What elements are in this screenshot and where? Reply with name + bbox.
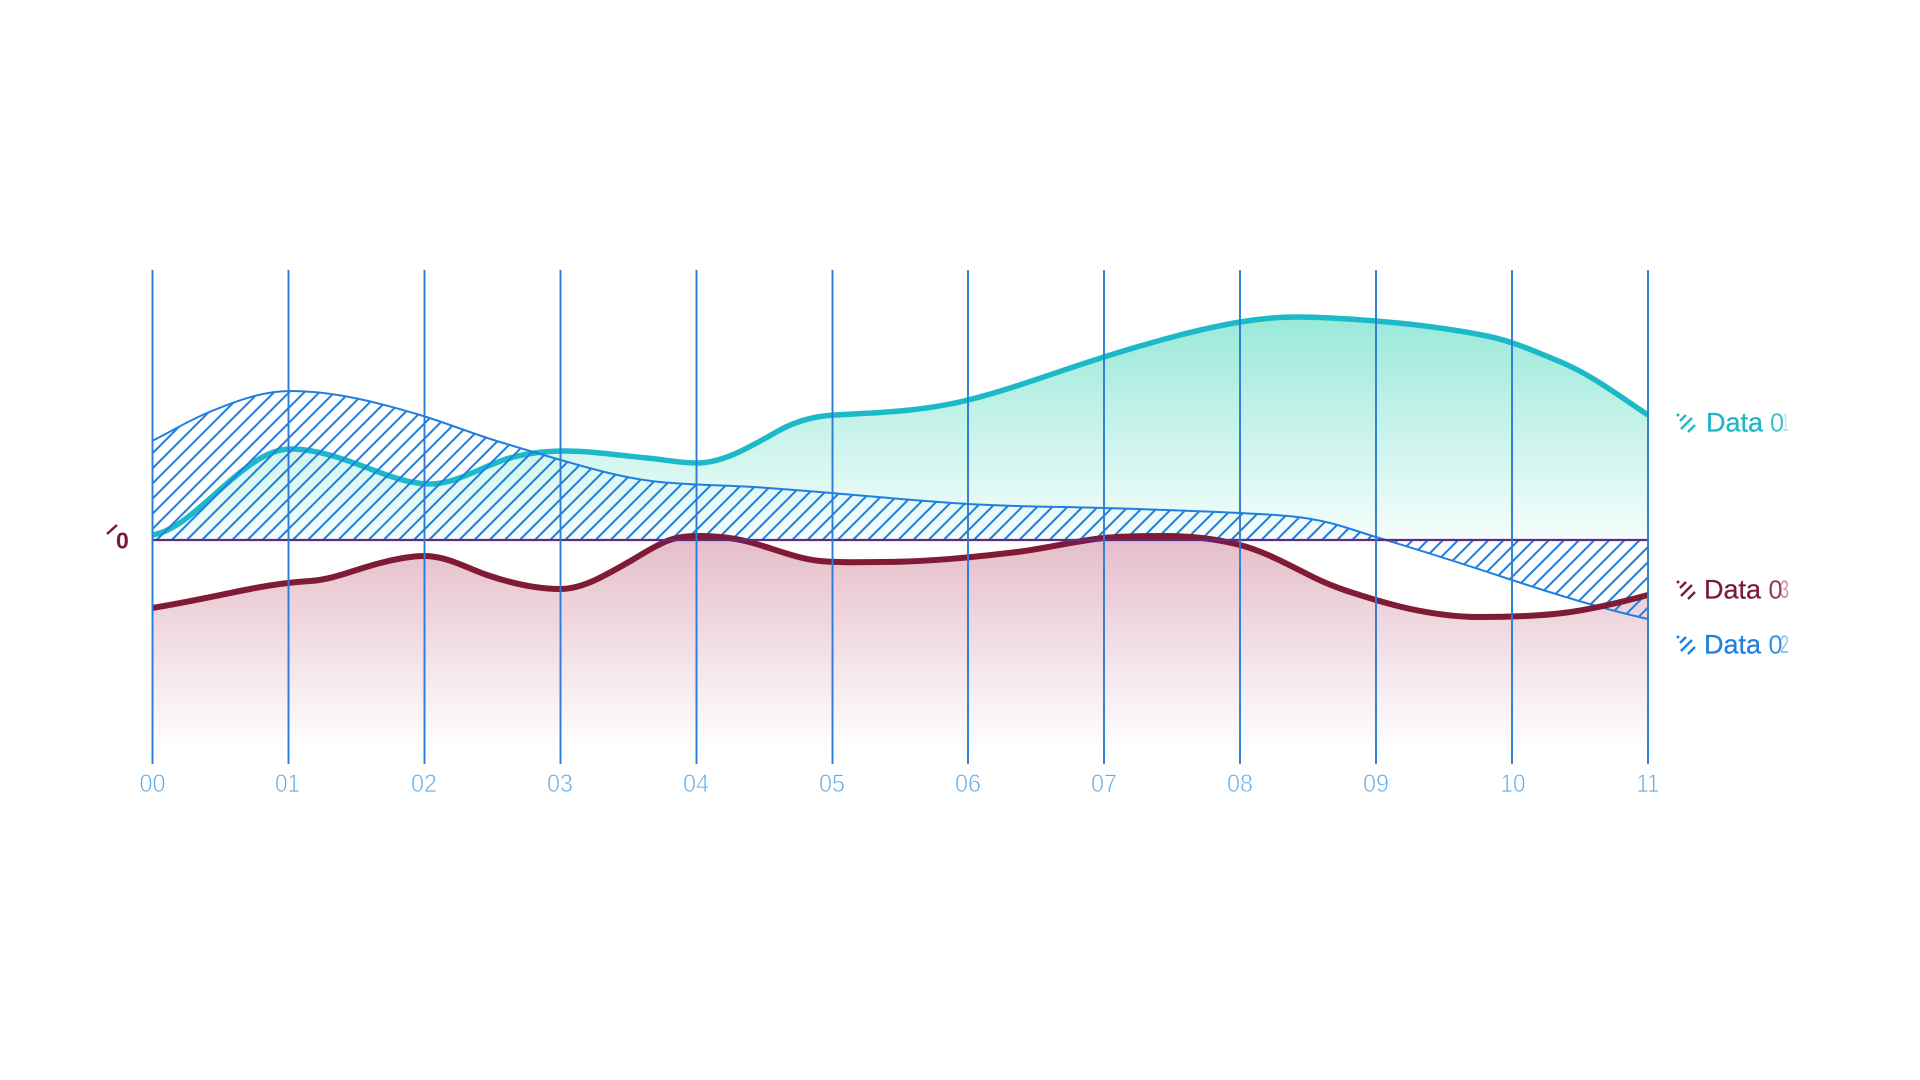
x-axis labels: 02	[411, 770, 437, 798]
x-axis labels: 03	[547, 770, 573, 798]
legend: Data 03: Data	[1704, 574, 1762, 604]
legend: Data 01: Data	[1706, 408, 1764, 438]
area chart infographic: 1	[1782, 409, 1788, 437]
x-axis labels: 01	[275, 770, 300, 798]
area chart infographic	[106, 270, 1788, 792]
legend: Data 02: Data	[1704, 630, 1762, 660]
x-axis labels: 04	[683, 770, 709, 798]
legend: Data 02	[1677, 630, 1789, 660]
x-axis labels: 09	[1363, 770, 1389, 798]
area: Data 03 maroon fill	[152, 536, 1648, 764]
y-axis zero label: 0	[116, 528, 129, 554]
legend: Data 03: 3	[1780, 576, 1789, 604]
legend: Data 01	[1677, 408, 1788, 438]
x-axis labels: 05	[819, 770, 845, 798]
x-axis labels: 06	[955, 770, 981, 798]
legend: Data 02: 0	[1768, 630, 1782, 660]
area: Data 02 hatching	[153, 392, 1648, 616]
x-axis labels: 10	[1500, 770, 1526, 798]
legend: Data 03	[1677, 574, 1789, 604]
line: Data 02 blue outline	[152, 391, 1648, 619]
legend: Data 03: 0	[1768, 574, 1782, 604]
line: Data 03 maroon curve	[152, 536, 1648, 617]
x-axis labels	[140, 770, 1660, 798]
x-axis labels: 08	[1227, 770, 1253, 798]
x-axis labels: 07	[1091, 770, 1117, 798]
x-axis labels: 11	[1636, 770, 1660, 798]
area: Data 01 teal fill	[152, 317, 1648, 540]
legend: Data 01: 0	[1770, 408, 1784, 438]
line: Data 01 teal curve	[152, 317, 1648, 535]
x-axis labels: 00	[140, 770, 166, 798]
legend: Data 02: 2	[1780, 631, 1789, 659]
vertical grid lines	[152, 270, 1648, 764]
y-axis zero label	[107, 525, 129, 554]
zero baseline	[152, 539, 1648, 541]
